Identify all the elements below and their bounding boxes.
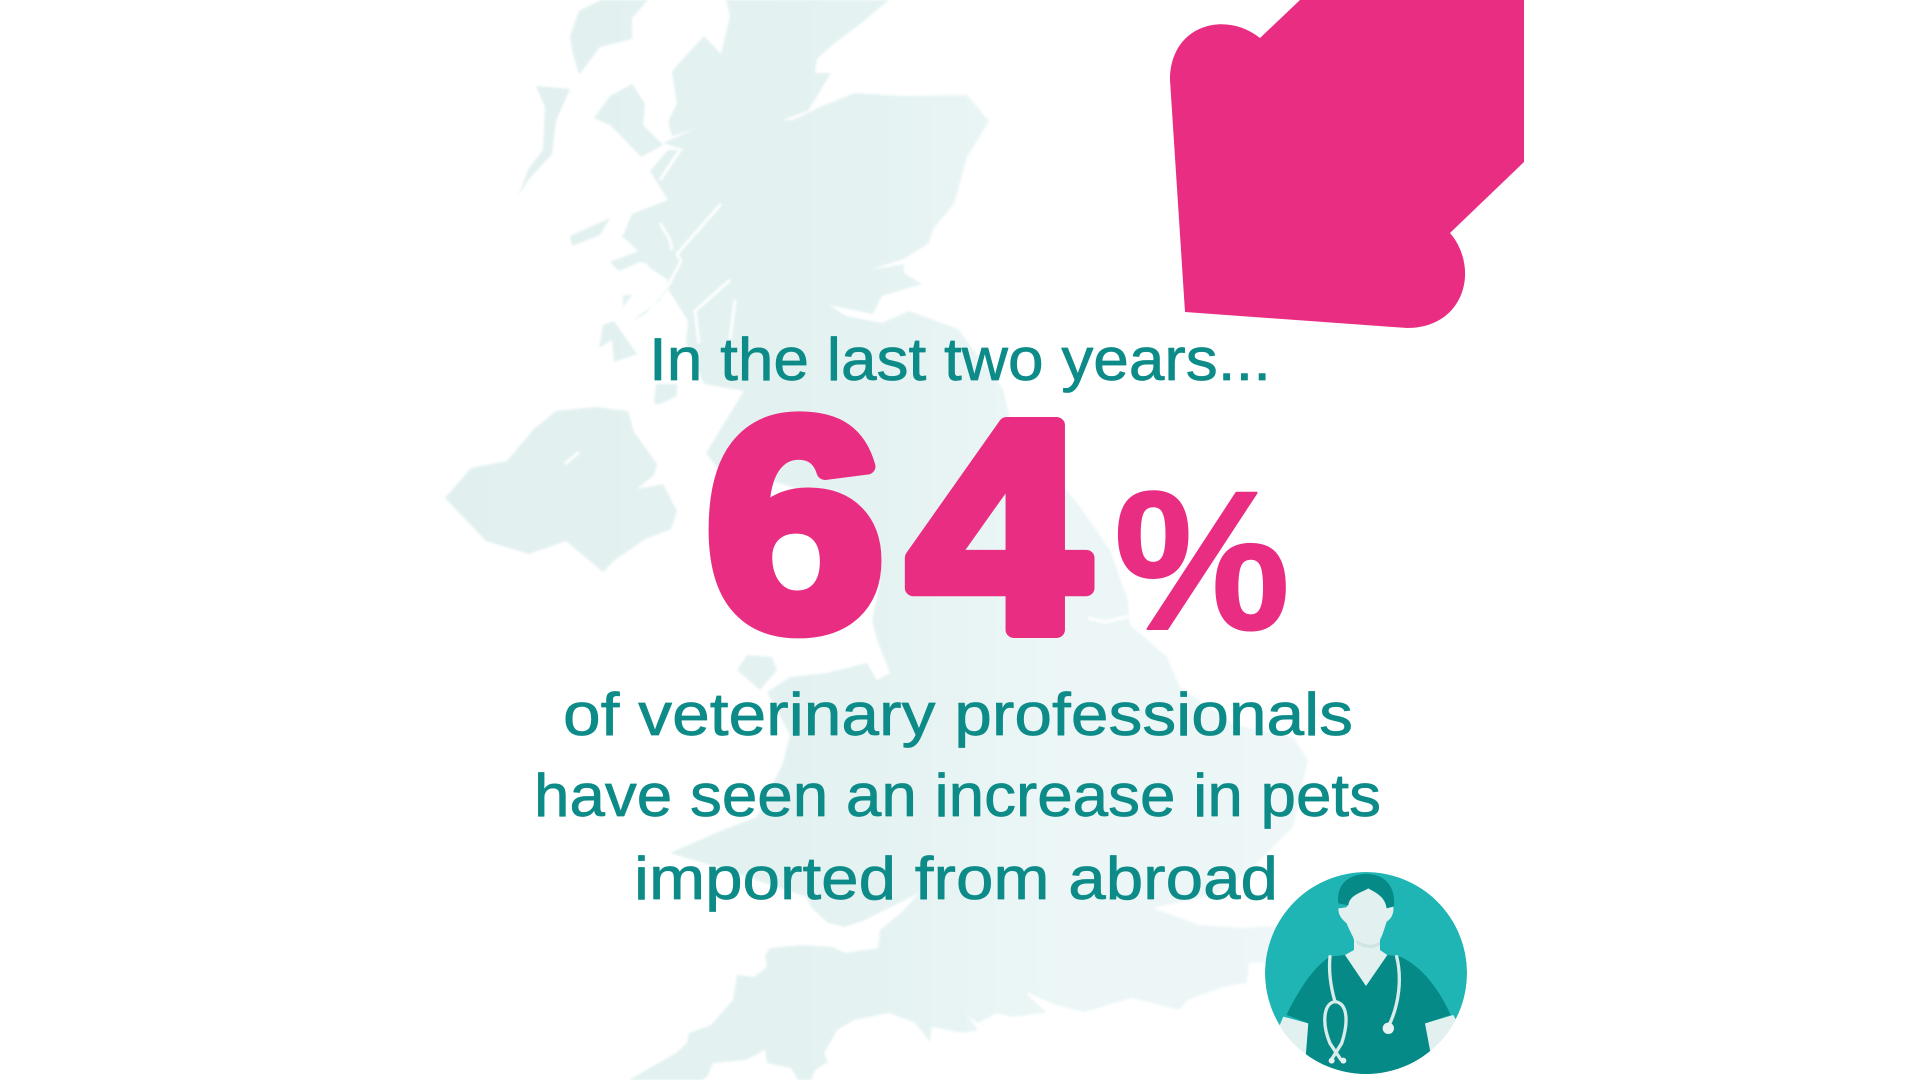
neck shadow [1357, 940, 1380, 948]
background map of the UK [445, 0, 1308, 1080]
big statistic 64%: % [1114, 450, 1290, 671]
description text [534, 681, 1381, 912]
hair [1338, 874, 1394, 908]
Mull [610, 223, 672, 271]
scrubs [1287, 955, 1451, 1080]
icon: veterinary professional [1265, 872, 1467, 1080]
Outer Hebrides north [570, 0, 648, 75]
Islay [599, 321, 637, 362]
pink speech pointer shape [1170, 0, 1524, 328]
Northern Ireland [445, 407, 677, 572]
big statistic 64% [705, 358, 1290, 693]
intro text: In the last two years... [649, 326, 1271, 393]
stethoscope [1325, 957, 1399, 1059]
big statistic 64%: 4 [909, 360, 1090, 693]
Arran [654, 384, 677, 404]
infographic canvas [445, 0, 1524, 1080]
Outer Hebrides south [518, 86, 570, 196]
Colonsay [623, 295, 632, 307]
description text: have seen an increase in pets [534, 762, 1381, 829]
description text: imported from abroad [634, 845, 1278, 912]
Anglesey [737, 655, 777, 690]
description text: of veterinary professionals [563, 681, 1353, 748]
Tiree and Coll [570, 218, 610, 246]
lochs and estuaries [565, 121, 1130, 1012]
Skye [594, 84, 663, 157]
arms [1280, 1015, 1456, 1054]
big statistic 64%: 6 [705, 358, 884, 691]
face and neck [1338, 888, 1393, 986]
Great Britain mainland [623, 0, 1308, 1080]
